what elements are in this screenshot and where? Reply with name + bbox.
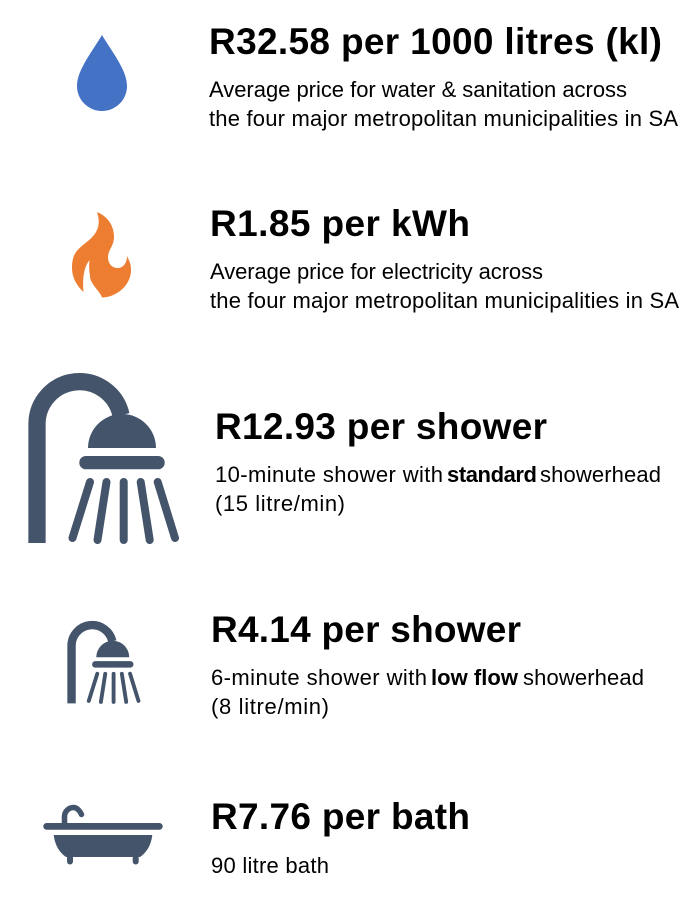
text: standard shower description: (15 litre/min) — [215, 491, 345, 516]
heading: bath cost: R7.76 per bath — [211, 796, 470, 837]
text: electricity description: Average price for electricity across — [210, 259, 543, 284]
heading: low flow shower cost: R4.14 per shower — [211, 609, 521, 650]
icon: large shower — [37, 382, 175, 543]
text: low flow shower description: showerhead — [523, 665, 644, 690]
heading: standard shower cost: R12.93 per shower — [215, 406, 547, 447]
text: standard shower description — [215, 462, 661, 516]
text: electricity description: the four major metropolitan municipalities in SA — [210, 288, 679, 313]
text: water description — [209, 77, 678, 131]
text: low flow shower description: low flow — [431, 665, 519, 690]
text: electricity description — [210, 259, 679, 313]
text: low flow shower description: 6-minute shower with — [211, 665, 427, 690]
text: standard shower description: 10-minute shower with — [215, 462, 443, 487]
text: water description: Average price for water & sanitation across — [209, 77, 627, 102]
heading: water price: R32.58 per 1000 litres (kl) — [209, 21, 662, 62]
icon: water drop — [77, 35, 127, 111]
icon: small shower — [72, 625, 138, 703]
text: standard shower description: standard — [447, 462, 537, 487]
text: standard shower description: showerhead — [540, 462, 661, 487]
text: low flow shower description — [211, 665, 644, 719]
text: bath description: 90 litre bath — [211, 853, 329, 878]
text: water description: the four major metropolitan municipalities in SA — [209, 106, 678, 131]
icon: flame — [72, 212, 131, 298]
icon: bathtub — [43, 808, 163, 864]
text: low flow shower description: (8 litre/min) — [211, 694, 329, 719]
heading: electricity price: R1.85 per kWh — [210, 203, 470, 244]
